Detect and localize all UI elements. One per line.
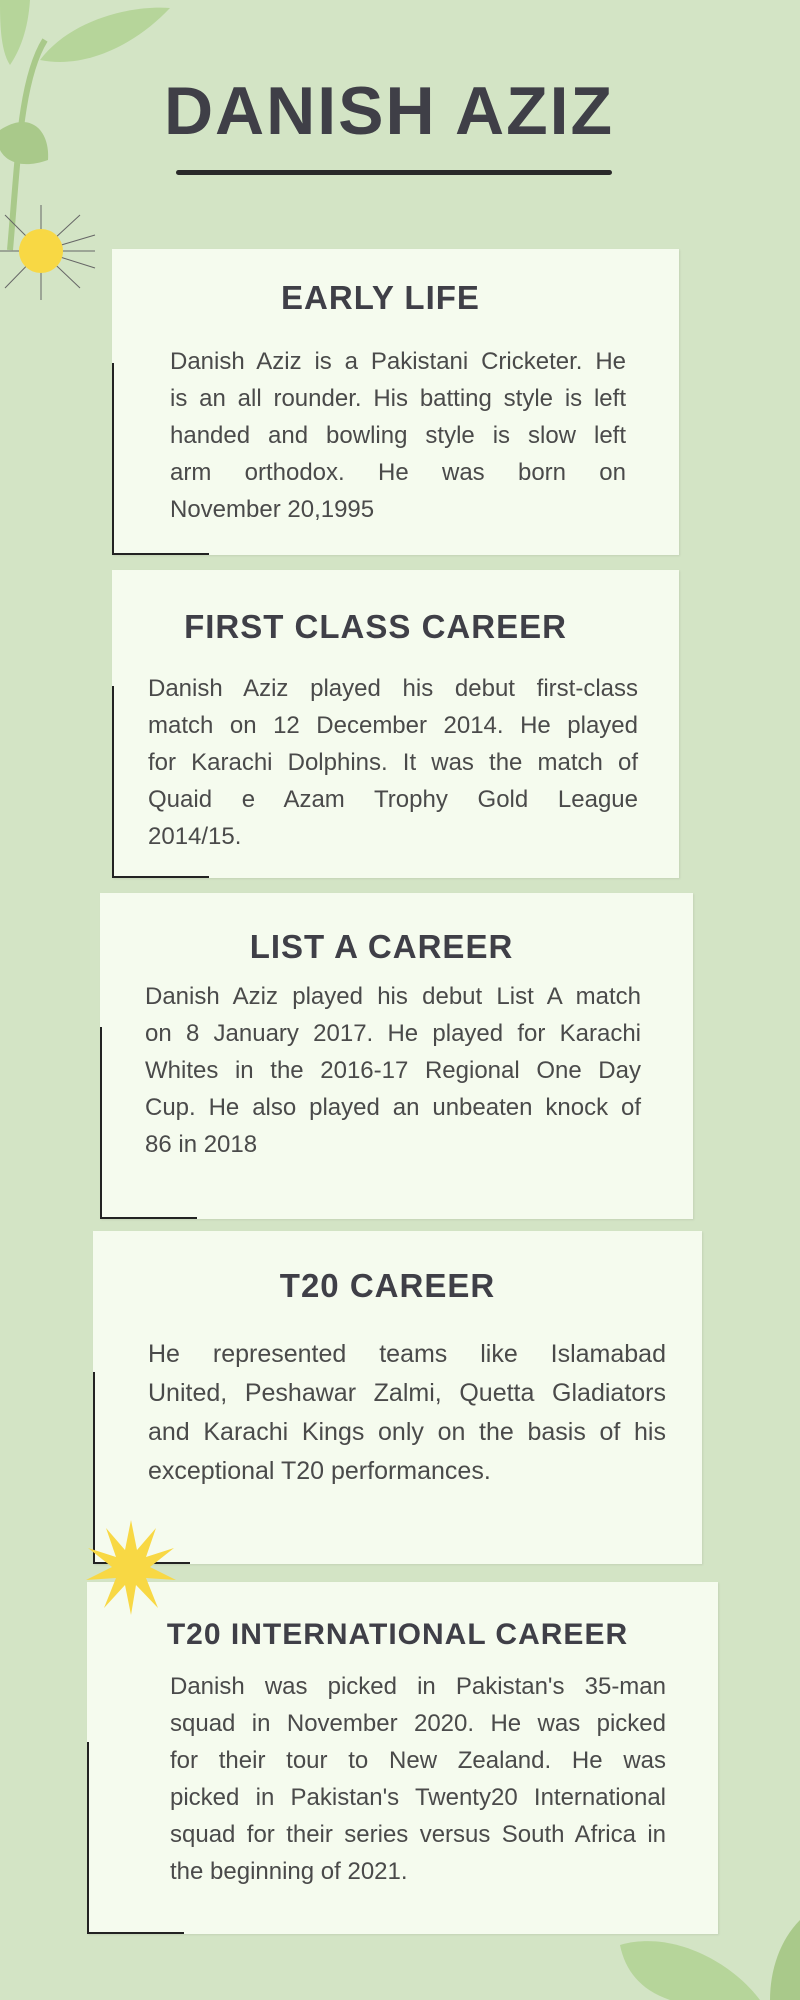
heading: first class career: FIRST CLASS CAREER	[184, 608, 567, 645]
text: early life: is an all rounder. His batting style is left	[170, 385, 626, 412]
text: early life: handed and bowling style is slow left	[170, 422, 626, 449]
text: early life: arm orthodox. He was born on	[170, 459, 626, 486]
text: list a career	[145, 983, 642, 1158]
panel: t20 international career	[87, 1582, 718, 1934]
heading: early life: EARLY LIFE	[281, 279, 480, 316]
panel: t20 career	[93, 1231, 702, 1564]
text: t20 career	[148, 1340, 666, 1485]
title: DANISH AZIZ	[164, 73, 614, 149]
icon: sun	[0, 205, 96, 300]
panel: early life	[112, 249, 679, 555]
text: list a career: 86 in 2018	[145, 1131, 257, 1158]
heading: t20 international career: T20 INTERNATIONAL CAREER	[167, 1618, 628, 1651]
decoration: leaves bottom-right	[620, 1920, 800, 2000]
text: first class career: Danish Aziz played his debut first-class	[148, 675, 638, 702]
text: t20 international career: picked in Pakistan's Twenty20 International	[170, 1784, 666, 1811]
text: early life: November 20,1995	[170, 496, 374, 523]
panel: list a career	[100, 893, 693, 1219]
icon: yellow starburst	[86, 1520, 176, 1615]
text: t20 career: and Karachi Kings only on the basis of his	[148, 1418, 666, 1446]
text: first class career: match on 12 December 2014. He played	[148, 712, 638, 739]
text: t20 international career: Danish was picked in Pakistan's 35-man	[170, 1673, 666, 1700]
text: t20 career: United, Peshawar Zalmi, Quetta Gladiators	[148, 1379, 666, 1407]
text: t20 international career: for their tour to New Zealand. He was	[170, 1747, 666, 1774]
text: list a career: Danish Aziz played his debut List A match	[145, 983, 641, 1010]
text: list a career: on 8 January 2017. He played for Karachi	[145, 1020, 641, 1047]
text: first class career: Quaid e Azam Trophy Gold League	[148, 786, 638, 813]
text: list a career: Cup. He also played an unbeaten knock of	[145, 1094, 641, 1121]
text: early life	[170, 348, 626, 523]
panel: first class career	[112, 570, 679, 878]
heading: t20 career: T20 CAREER	[280, 1267, 495, 1304]
decoration: leaves top-left	[0, 0, 170, 250]
text: first class career: 2014/15.	[148, 823, 241, 850]
text: t20 international career: the beginning of 2021.	[170, 1858, 408, 1885]
heading: list a career: LIST A CAREER	[250, 928, 513, 965]
text: t20 international career	[170, 1673, 666, 1885]
text: first class career	[148, 675, 638, 850]
text: t20 international career: squad in November 2020. He was picked	[170, 1710, 666, 1737]
text: first class career: for Karachi Dolphins. It was the match of	[148, 749, 638, 776]
text: list a career: Whites in the 2016-17 Regional One Day	[145, 1057, 641, 1084]
text: early life: Danish Aziz is a Pakistani Cricketer. He	[170, 348, 626, 375]
text: t20 career: exceptional T20 performances.	[148, 1457, 491, 1485]
text: t20 career: He represented teams like Islamabad	[148, 1340, 666, 1368]
text: t20 international career: squad for their series versus South Africa in	[170, 1821, 666, 1848]
title underline	[176, 170, 612, 175]
